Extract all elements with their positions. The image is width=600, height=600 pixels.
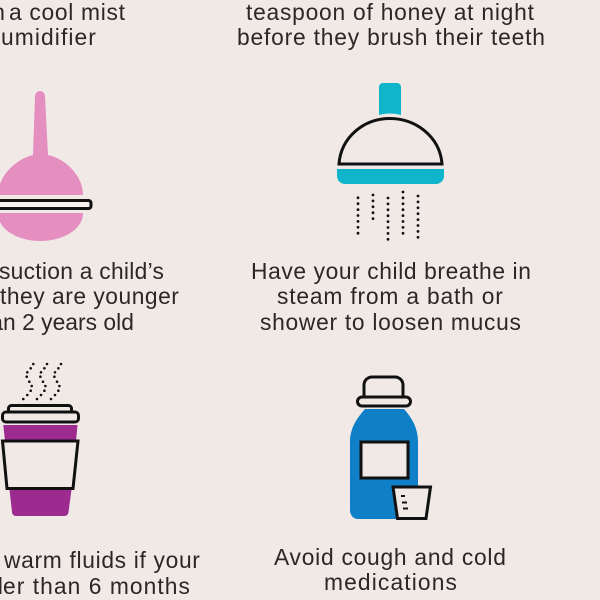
text: medication tip: Avoid cough and cold xyxy=(274,544,506,570)
text: steam tip: Have your child breathe in xyxy=(251,258,531,284)
text: medication tip: medications xyxy=(324,569,457,595)
text: steam tip: steam from a bath or xyxy=(277,283,503,309)
text: steam tip: shower to loosen mucus xyxy=(260,309,521,335)
icon: shower head xyxy=(337,83,444,240)
icon: medicine bottle and cup xyxy=(350,377,430,519)
steam dots xyxy=(23,364,61,399)
text: suction tip xyxy=(0,258,179,335)
text: suction tip: n 2 years old xyxy=(3,309,134,335)
text: warm fluids tip xyxy=(0,547,200,599)
text: humidifier tip: umidifier xyxy=(1,24,96,50)
text: humidifier tip xyxy=(0,0,126,50)
text: warm fluids tip: er than 6 months xyxy=(3,573,190,599)
text: honey tip xyxy=(237,0,545,50)
text: honey tip: before they brush their teeth xyxy=(237,24,545,50)
text: suction tip: suction a child’s xyxy=(0,258,164,284)
text: medication tip xyxy=(274,544,506,595)
icon: nasal suction bulb xyxy=(0,91,91,241)
text: warm fluids tip: warm fluids if your xyxy=(3,547,200,573)
text: suction tip: they are younger xyxy=(0,283,179,309)
icon: hot drink cup xyxy=(2,364,78,516)
text: steam tip xyxy=(251,258,531,335)
